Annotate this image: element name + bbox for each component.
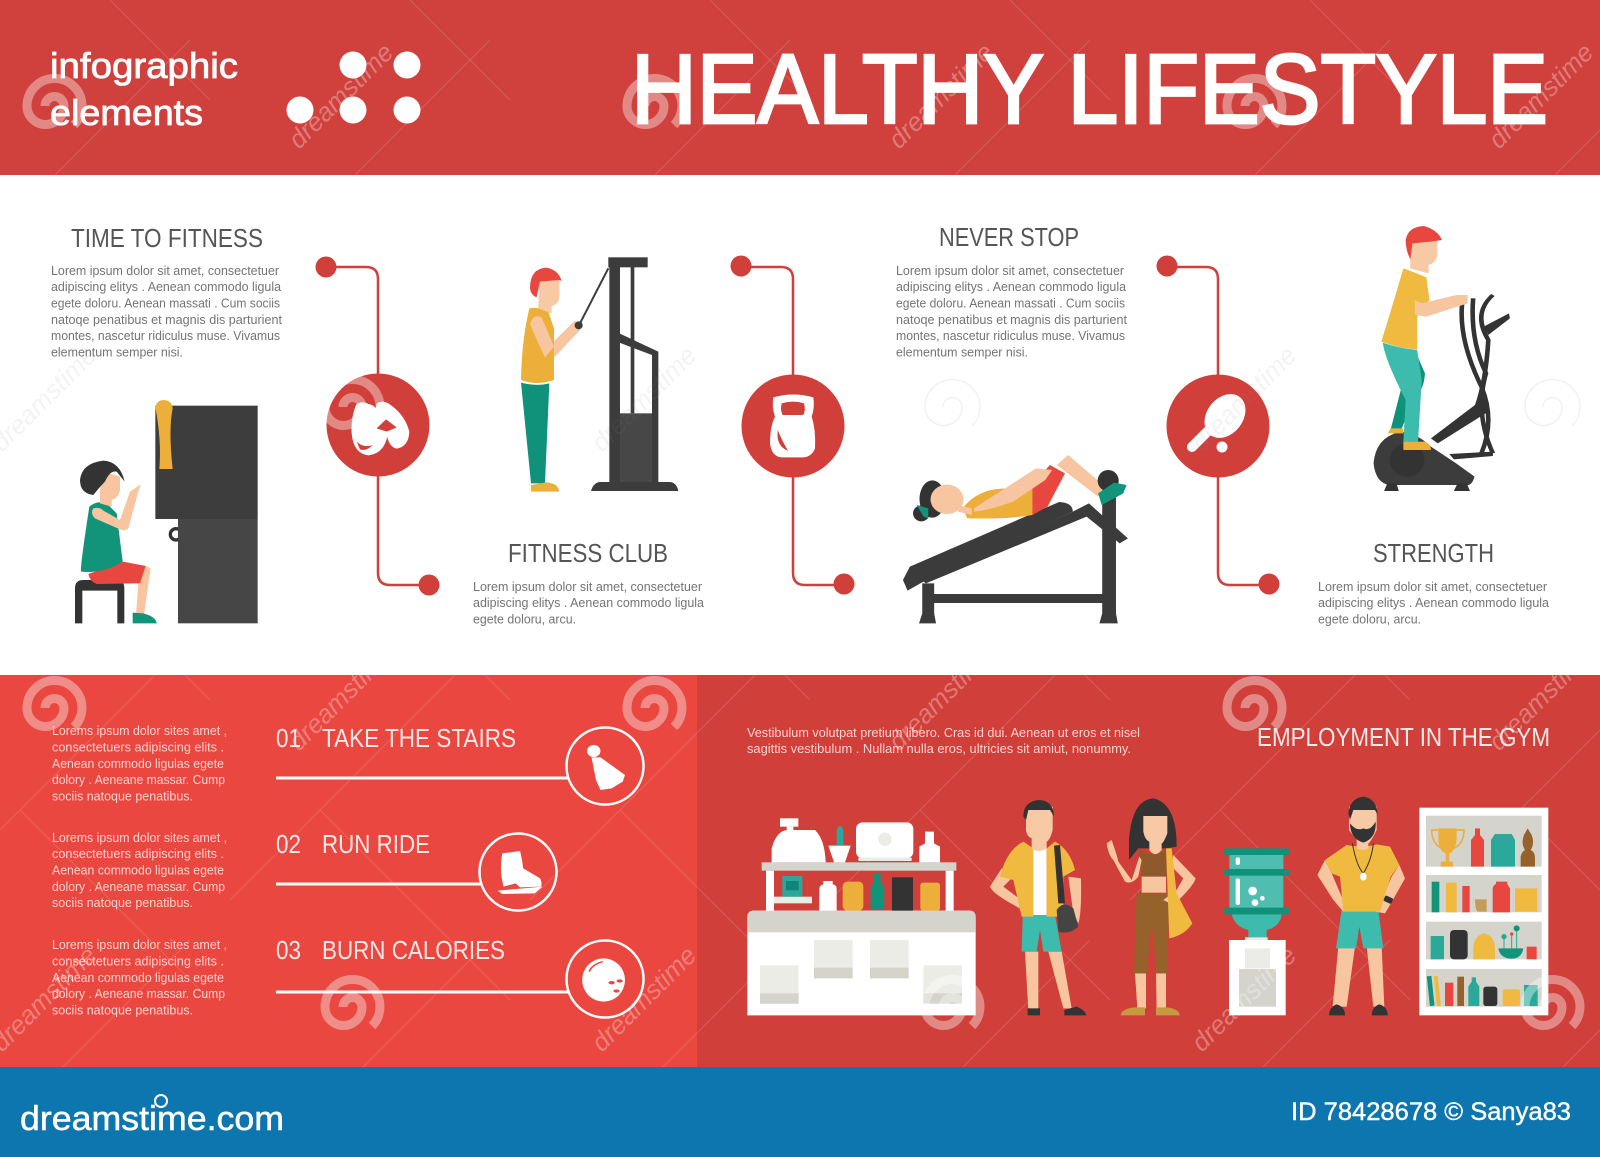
stock watermark: dreamstime: [1185, 340, 1302, 457]
text: tip 3 description: consectetuers adipiscing elits .: [52, 954, 224, 968]
tip 2: run ride: RUN RIDE: [322, 829, 430, 859]
text: employment description: sagittis vestibulum . Nullam nulla eros, ultricies sit amiut, nonummy.: [747, 741, 1131, 756]
text: fitness club: [473, 538, 705, 626]
stock watermark: dreamstime: [585, 340, 702, 457]
stock watermark: dreamstime: [585, 940, 702, 1057]
icon: boxing gloves: [352, 402, 409, 455]
text: employment description: [747, 725, 1140, 756]
text: strength: Lorem ipsum dolor sit amet, consectetuer: [1318, 579, 1548, 594]
text: fitness club: egete doloru, arcu.: [473, 612, 576, 626]
footer band: [0, 1067, 1600, 1157]
text: tip 1 description: consectetuers adipiscing elits .: [52, 740, 224, 754]
illustration: trophy and supplement shelf: [1419, 808, 1548, 1015]
text: tip 2 description: Lorems ipsum dolor sites amet ,: [52, 830, 227, 845]
illustration: man on elliptical trainer: [1374, 226, 1510, 491]
icon: shuttlecock: [587, 745, 625, 790]
text: fitness club: Lorem ipsum dolor sit amet, consectetuer: [473, 579, 703, 594]
tip 3: burn calories: 03: [276, 935, 301, 965]
text: tip 2 description: sociis natoque penatibus.: [52, 895, 193, 910]
panel: employment in the gym: [697, 675, 1600, 1067]
illustration: man at cable machine: [521, 257, 678, 492]
stock watermark: dreamstime: [1185, 940, 1302, 1057]
text: strength: [1318, 538, 1550, 626]
heading: employment in the gym: EMPLOYMENT IN THE GYM: [1257, 722, 1550, 752]
text: tip 2 description: Aenean commodo ligulas egete: [52, 862, 224, 878]
text: tip 1 description: sociis natoque penatibus.: [52, 788, 193, 804]
panel: time to fitness text: [51, 223, 282, 360]
infographic elements label: infographic: [50, 45, 238, 86]
footer logo: dreamstime.com: [20, 1100, 284, 1138]
text: never stop: elementum semper nisi.: [896, 344, 1028, 360]
title: HEALTHY LIFESTYLE: [631, 34, 1548, 144]
text: tip 1 description: [52, 723, 227, 804]
panel: time to fitness text: adipiscing elitys . Aenean commodo ligula: [51, 279, 282, 294]
panel: time to fitness text: elementum semper nisi.: [51, 344, 183, 360]
infographic elements label: elements: [50, 92, 203, 133]
text: strength: adipiscing elitys . Aenean commodo ligula: [1318, 595, 1550, 610]
icon: ice skate: [498, 851, 542, 894]
text: tip 1 description: Lorems ipsum dolor sites amet ,: [52, 723, 227, 738]
tip 1: take the stairs: [276, 723, 644, 804]
illustration: child at arcade machine: [75, 400, 258, 623]
icon: five dots: [286, 52, 420, 124]
text: strength: STRENGTH: [1373, 538, 1494, 568]
panel: time to fitness text: montes, nascetur ridiculus muse. Vivamus: [51, 328, 280, 343]
text: never stop: montes, nascetur ridiculus muse. Vivamus: [896, 328, 1125, 343]
text: never stop: egete doloru. Aenean massati . Cum sociis: [896, 296, 1125, 310]
text: tip 3 description: [52, 937, 227, 1018]
connector with boxing gloves icon: [316, 256, 440, 596]
infographic elements label: [50, 45, 238, 133]
illustration: shop counter: [747, 818, 976, 1015]
stock watermark: dreamstime: [1482, 37, 1599, 154]
illustration: bearded trainer: [1317, 797, 1405, 1015]
text: strength: egete doloru, arcu.: [1318, 612, 1421, 626]
text: never stop: NEVER STOP: [939, 222, 1079, 252]
text: tip 3 description: Lorems ipsum dolor sites amet ,: [52, 937, 227, 952]
text: fitness club: adipiscing elitys . Aenean commodo ligula: [473, 595, 705, 610]
connector with ping-pong paddle icon: [1156, 256, 1280, 594]
text: tip 3 description: Aenean commodo ligulas egete: [52, 970, 224, 985]
tip 3: burn calories: [276, 935, 644, 1018]
text: tip 1 description: Aenean commodo ligulas egete: [52, 756, 224, 771]
tip 2: run ride: 02: [276, 829, 301, 859]
tip 3: burn calories: BURN CALORIES: [322, 935, 505, 965]
icon: kettlebell: [770, 394, 815, 457]
text: tip 2 description: [52, 830, 227, 910]
panel: time to fitness text: egete doloru. Aenean massati . Cum sociis: [51, 296, 280, 310]
panel: time to fitness text: natoqe penatibus et magnis dis parturient: [51, 312, 282, 327]
text: tip 3 description: dolory . Aeneane massar. Cump: [52, 986, 225, 1001]
text: tip 3 description: sociis natoque penatibus.: [52, 1002, 193, 1018]
stock watermark: dreamstime: [282, 37, 399, 154]
panel: time to fitness text: Lorem ipsum dolor sit amet, consectetuer: [51, 263, 280, 278]
stock watermark: dreamstime: [882, 639, 999, 756]
stock watermark: dreamstime: [282, 639, 399, 756]
panel: numbered tips: [0, 675, 697, 1067]
text: never stop: adipiscing elitys . Aenean commodo ligula: [896, 279, 1127, 294]
text: fitness club: FITNESS CLUB: [508, 538, 668, 568]
tip 1: take the stairs: 01: [276, 723, 301, 753]
illustration: person on incline bench: [903, 455, 1128, 623]
text: never stop: [896, 222, 1127, 360]
illustration: water cooler: [1223, 848, 1290, 1015]
text: tip 2 description: dolory . Aeneane massar. Cump: [52, 879, 225, 894]
footer image id: ID 78428678 © Sanya83: [1291, 1098, 1571, 1126]
stock watermark: dreamstime: [882, 37, 999, 154]
text: tip 1 description: dolory . Aeneane massar. Cump: [52, 772, 225, 787]
text: employment description: Vestibulum volutpat pretium libero. Cras id dui. Aenean ut eros et nisel: [747, 725, 1140, 740]
text: never stop: Lorem ipsum dolor sit amet, consectetuer: [896, 263, 1125, 278]
text: never stop: natoqe penatibus et magnis dis parturient: [896, 312, 1127, 327]
illustration: man with shoulder bag: [990, 800, 1087, 1015]
connector with kettlebell icon: [730, 256, 854, 594]
stock watermark: dreamstime: [1482, 639, 1599, 756]
panel: time to fitness text: TIME TO FITNESS: [71, 223, 263, 253]
text: tip 2 description: consectetuers adipiscing elits .: [52, 846, 224, 861]
illustration: woman waving: [1107, 798, 1196, 1015]
header band: [0, 0, 1600, 175]
tip 1: take the stairs: TAKE THE STAIRS: [322, 723, 516, 753]
icon: bowling ball: [582, 958, 625, 1002]
tip 2: run ride: [276, 829, 556, 910]
icon: ping-pong paddle: [1192, 386, 1254, 452]
